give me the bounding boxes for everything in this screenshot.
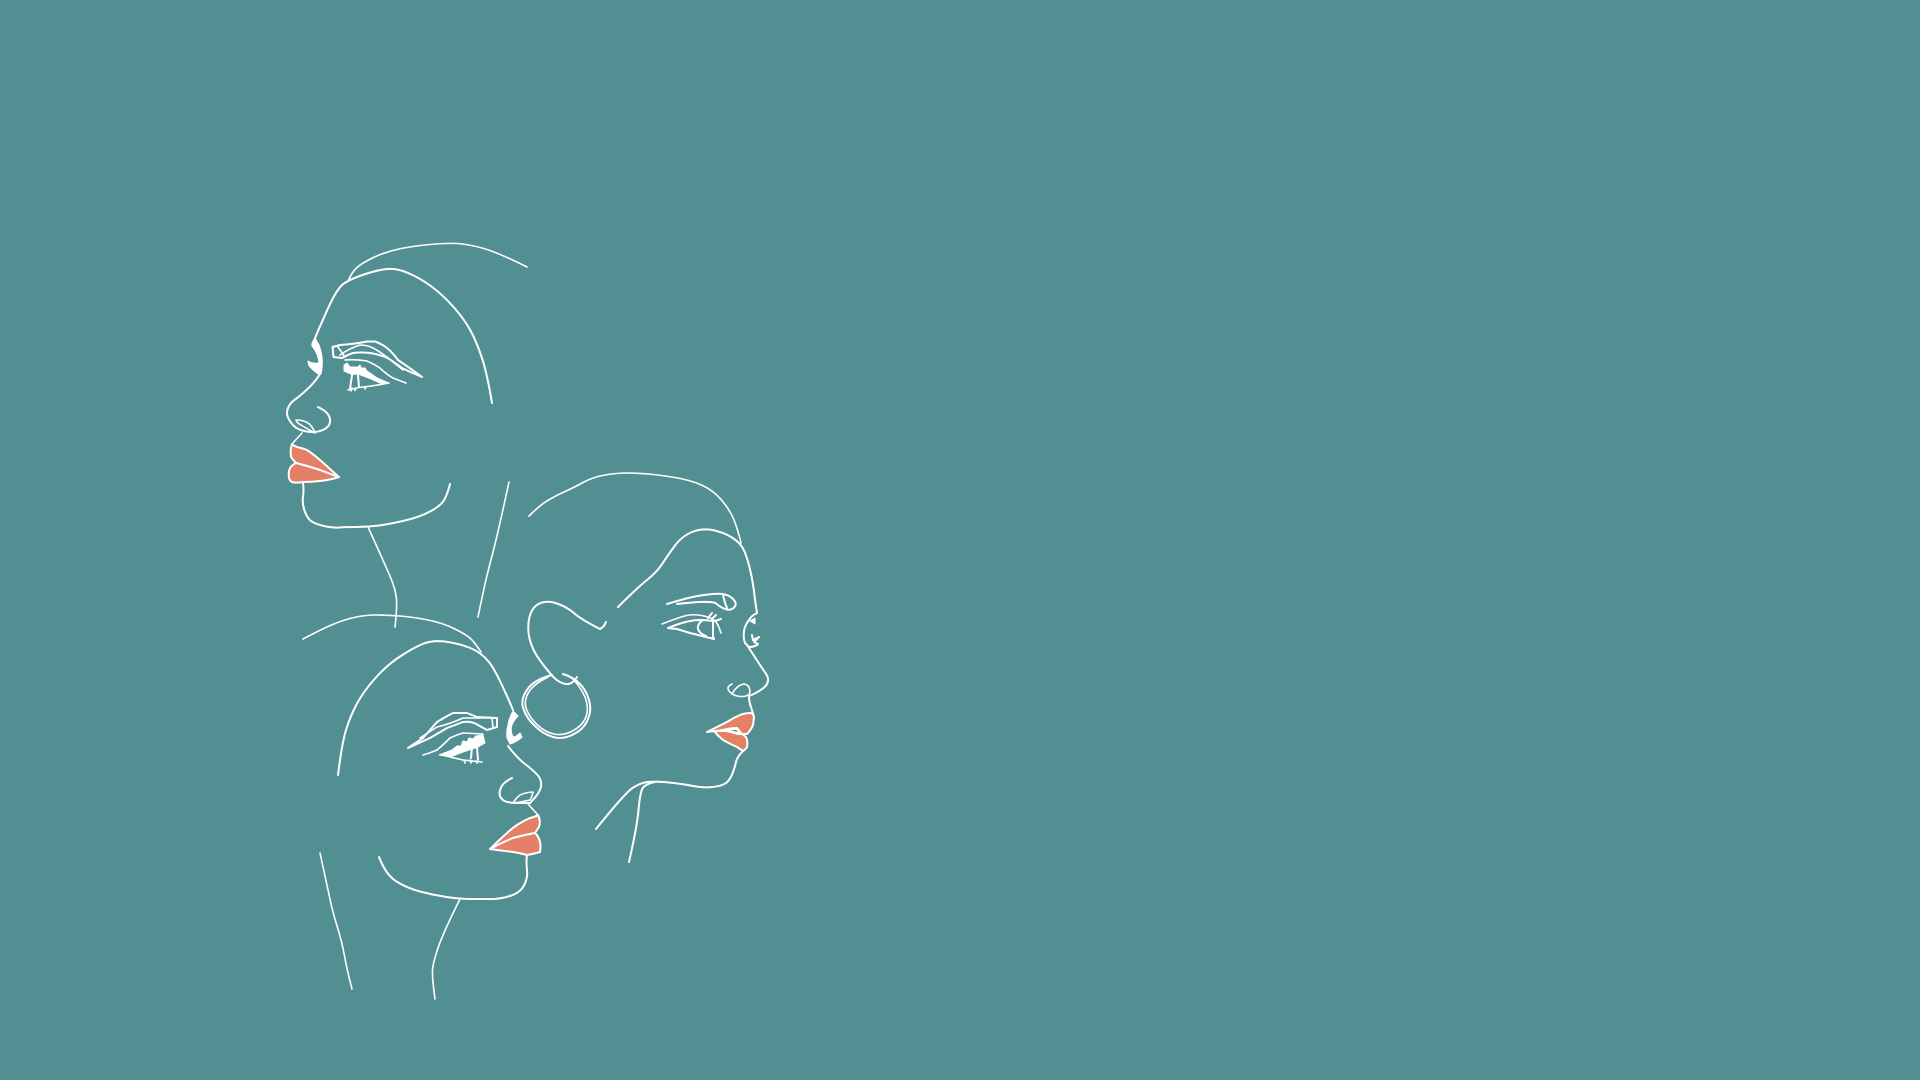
chin and jaw [379,855,527,899]
brow inner strokes [338,345,403,370]
upper lip line to mouth [749,696,754,717]
lips [490,815,540,855]
brow shape [332,342,422,377]
brow shape [408,713,497,748]
hair outline [529,473,741,543]
neck back [320,853,352,989]
lower lip [490,833,540,855]
neck back [478,482,509,617]
lashes [708,613,721,621]
neck [629,782,655,862]
hair outline [348,243,527,281]
brow inner strokes [420,718,493,738]
brow ridge [308,338,322,374]
crown and forehead outline [338,641,513,775]
philtrum [292,433,302,444]
face: right woman, looking right, with hoop earring [522,473,768,862]
eye: lash line and iris [439,735,485,763]
eye: brow [408,713,497,748]
iris [698,620,706,636]
nostril curl [728,684,750,697]
eye: crease [423,733,483,755]
chin and jaw [303,483,450,528]
eyebrow [667,594,736,610]
upper lip [291,444,339,477]
upper lip [490,815,540,849]
eye [662,613,721,639]
nostril [296,420,315,433]
ear [528,602,606,684]
forehead and temple outline [618,529,757,613]
nostril curl [500,778,530,803]
lips [707,713,754,751]
lower lip [289,463,339,483]
hoop outer [522,674,590,738]
lips [289,444,339,483]
eye: lash line and iris [344,363,389,391]
face: bottom woman, looking right [303,615,541,999]
chin and jaw [596,751,743,829]
upper lid [662,615,721,633]
lower lip [714,731,747,751]
neck front [368,527,397,627]
upper lip [707,713,754,734]
inner nostril [513,792,533,803]
hair outline [303,615,481,652]
neck front [432,899,460,999]
inner lash accent [750,618,755,624]
face: top woman, looking left [287,243,527,627]
nose outline [747,645,768,696]
brow ridge [507,711,522,744]
eye: crease [345,360,406,383]
mouth opening [724,729,741,734]
nose outline [287,374,330,432]
eye opening [668,620,714,639]
brow-to-nose outer eye [744,613,759,647]
hoop earring [522,674,590,738]
nose outline [508,746,541,803]
eye: brow [332,342,422,377]
hoop inner [525,677,587,735]
forehead and crown outline [315,269,492,403]
philtrum [528,804,538,815]
